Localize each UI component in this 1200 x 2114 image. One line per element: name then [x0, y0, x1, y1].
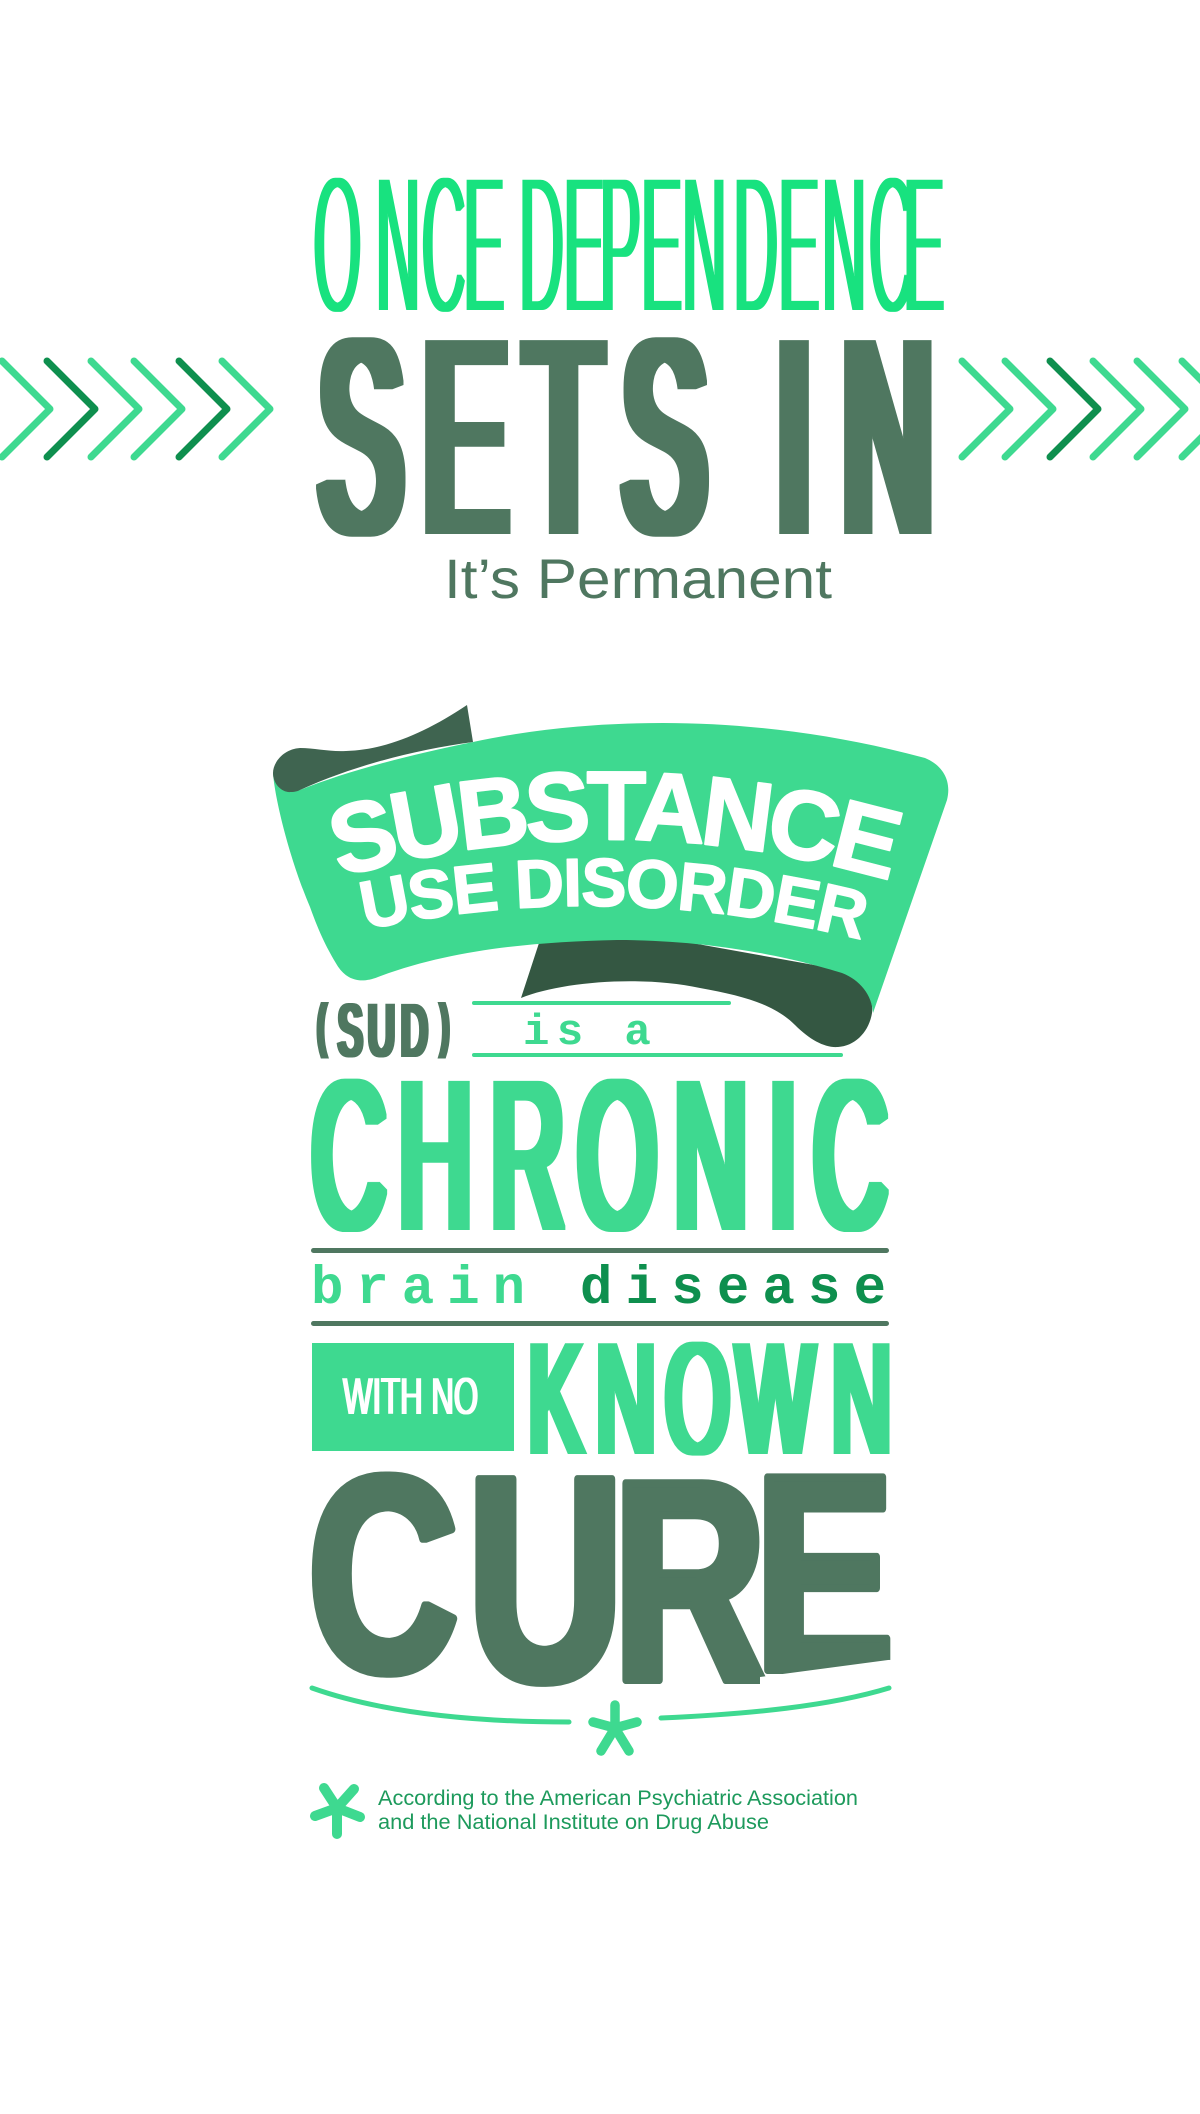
icon: right chevrons — [962, 361, 1200, 457]
rule: upper — [311, 1248, 889, 1253]
heading: chronic: CHRONIC — [312, 1038, 887, 1274]
text: (SUD): SUD — [338, 987, 428, 1073]
text: (SUD): ( — [317, 993, 327, 1060]
icon: footnote asterisk — [315, 1788, 360, 1834]
heading: cure: E — [755, 1418, 893, 1730]
box: with no — [312, 1343, 514, 1451]
footnote: According to the American Psychiatric Association — [378, 1787, 858, 1810]
heading: cure: R — [613, 1422, 766, 1741]
heading: known: KNOWN — [528, 1309, 891, 1489]
text: with no: WITH NO — [343, 1368, 478, 1426]
decorative divider with asterisk — [312, 1688, 889, 1751]
banner: substance use disorder — [273, 705, 948, 1048]
infographic canvas — [0, 178, 1200, 1839]
text lines: is a — [472, 1001, 843, 1058]
text: (SUD) — [317, 987, 449, 1073]
text: brain: brain — [311, 1259, 538, 1320]
heading: cure: U — [467, 1416, 623, 1743]
rule: lower — [311, 1321, 889, 1326]
subtitle: it's permanent: It’s Permanent — [444, 547, 832, 610]
banner heading: use disorder: USE DISORDER — [359, 858, 866, 940]
heading: cure — [312, 1472, 890, 1687]
text: is a: is a — [523, 1008, 658, 1058]
heading: cure: C — [308, 1419, 458, 1731]
text: (SUD): ) — [440, 993, 449, 1060]
banner fold: top left — [273, 705, 473, 792]
title: sets in: SETS IN — [319, 283, 933, 591]
banner heading: substance: SUBSTANCE — [331, 771, 903, 880]
banner fold: bottom right — [521, 930, 872, 1047]
banner body — [273, 723, 948, 1013]
icon: left chevrons — [2, 361, 270, 457]
title: once dependence: ONCE DEPENDENCE — [314, 135, 944, 356]
footnote: and the National Institute on Drug Abuse — [378, 1811, 769, 1834]
text: disease: disease — [580, 1259, 899, 1320]
footnote — [378, 1787, 858, 1834]
icon: asterisk — [593, 1705, 637, 1751]
